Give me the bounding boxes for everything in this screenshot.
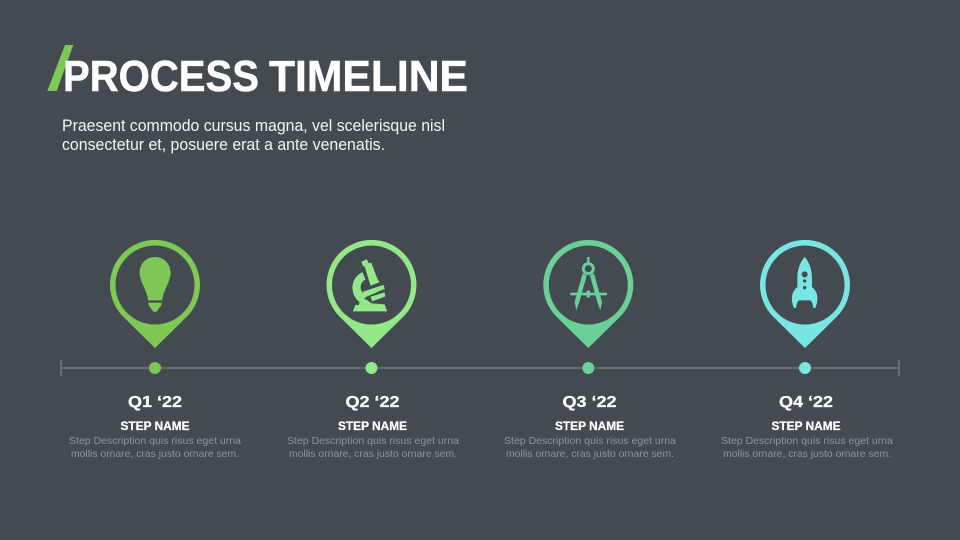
step description 2: Step Description quis risus eget urna	[287, 435, 459, 447]
step name 1: STEP NAME	[120, 419, 190, 433]
step description 2	[287, 435, 459, 460]
timeline dot 2	[366, 362, 378, 374]
title: TIMELINE	[269, 52, 468, 101]
title: PROCESS	[63, 52, 259, 101]
quarter label 4: Q4 ‘22	[779, 394, 833, 411]
step description 4: Step Description quis risus eget urna	[721, 435, 893, 447]
quarter label 3: Q3 ‘22	[562, 394, 616, 411]
step description 3: Step Description quis risus eget urna	[504, 435, 676, 447]
icon: light bulb	[140, 257, 171, 312]
pin marker 4	[760, 240, 850, 348]
step description 1: Step Description quis risus eget urna	[69, 435, 241, 447]
icon: rocket	[792, 257, 817, 308]
step name 2: STEP NAME	[338, 419, 407, 433]
title	[47, 45, 468, 101]
step 4: Q4	[721, 240, 893, 460]
timeline axis	[61, 360, 899, 376]
step description 1	[69, 435, 241, 460]
step 1: Q1	[69, 240, 241, 460]
quarter label 1: Q1 ‘22	[128, 394, 182, 411]
timeline dot 1	[149, 362, 161, 374]
step name 4: STEP NAME	[772, 419, 840, 433]
step description 3	[504, 435, 676, 460]
quarter label 2: Q2 ‘22	[346, 394, 400, 411]
step 2: Q2	[287, 240, 459, 460]
pin marker 3	[543, 240, 633, 348]
step description 3: mollis ornare, cras justo ornare sem.	[506, 448, 674, 460]
subtitle text: consectetur et, posuere erat a ante venenatis.	[62, 136, 385, 154]
step 3: Q3	[504, 240, 676, 460]
pin marker 2	[326, 240, 417, 348]
subtitle text: Praesent commodo cursus magna, vel scelerisque nisl	[62, 117, 445, 135]
step description 4: mollis ornare, cras justo ornare sem.	[723, 448, 891, 460]
step description 2: mollis ornare, cras justo ornare sem.	[289, 448, 457, 460]
step description 1: mollis ornare, cras justo ornare sem.	[71, 448, 239, 460]
icon: microscope	[353, 260, 387, 311]
step description 4	[721, 435, 893, 460]
subtitle text	[62, 117, 445, 154]
timeline dot 4	[799, 362, 811, 374]
step name 3: STEP NAME	[555, 419, 624, 433]
timeline dot 3	[582, 362, 594, 374]
pin marker 1	[110, 240, 200, 348]
icon: drafting compass	[570, 257, 607, 310]
